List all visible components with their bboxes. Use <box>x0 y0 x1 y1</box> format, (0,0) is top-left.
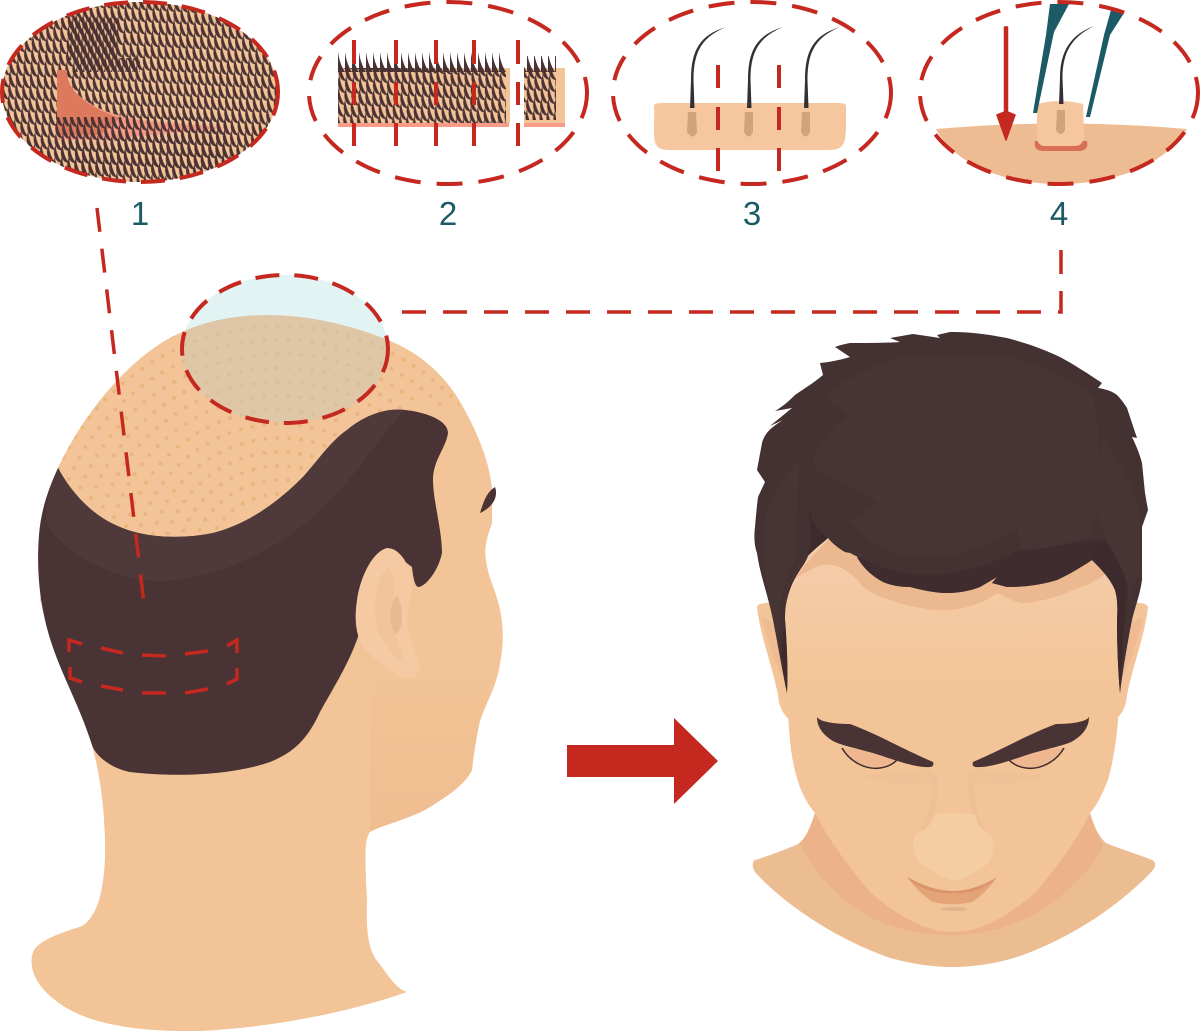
step 4: graft implantation <box>920 2 1198 184</box>
step numbers: 2 <box>439 195 457 232</box>
step 1: donor hair close-up <box>0 0 280 185</box>
hair darker fringe right <box>1092 540 1128 693</box>
nose shadows <box>920 772 938 835</box>
step numbers: 4 <box>1050 195 1068 232</box>
hair <box>38 410 448 775</box>
eyelids <box>842 748 897 768</box>
hair lighter top <box>813 354 1101 557</box>
ears <box>757 603 790 720</box>
arrow <box>567 718 718 804</box>
oval dashed outline on crown <box>182 275 388 423</box>
hair lower fringe shade <box>828 538 1100 593</box>
chin mark <box>941 907 967 911</box>
pale-blue recipient area behind crown <box>182 275 388 423</box>
eyebrows <box>817 717 933 767</box>
face <box>785 530 1120 932</box>
neck shadow <box>800 813 1103 935</box>
lips <box>907 877 997 904</box>
hair highlight band <box>46 410 405 581</box>
donor area dashed marker <box>69 640 237 693</box>
step 3: follicle grafts <box>613 2 891 184</box>
implant dot rows <box>58 316 460 536</box>
eyebrow <box>480 487 496 513</box>
connector line to step 4 <box>402 245 1061 312</box>
nose tip <box>913 813 993 880</box>
left side lighter strand <box>763 460 800 640</box>
jaw shading <box>370 663 500 832</box>
ear <box>356 548 420 678</box>
right side lighter strand <box>1098 440 1140 600</box>
connector line from step 1 <box>97 208 145 612</box>
hair darker fringe left <box>782 507 828 693</box>
neck and shoulders <box>753 813 1155 967</box>
step 2: donor strip cut into grafts <box>309 2 587 184</box>
step numbers: 1 <box>131 195 149 232</box>
skin: head, neck and shoulder <box>32 315 503 1031</box>
step numbers: 3 <box>743 195 761 232</box>
forehead hair shadow <box>795 540 1107 610</box>
hair <box>754 332 1148 693</box>
front view head <box>753 332 1155 967</box>
crown overlay ellipse <box>182 315 386 423</box>
back view head <box>22 275 538 1031</box>
step numbers <box>131 195 1068 232</box>
ear inner <box>375 566 405 664</box>
